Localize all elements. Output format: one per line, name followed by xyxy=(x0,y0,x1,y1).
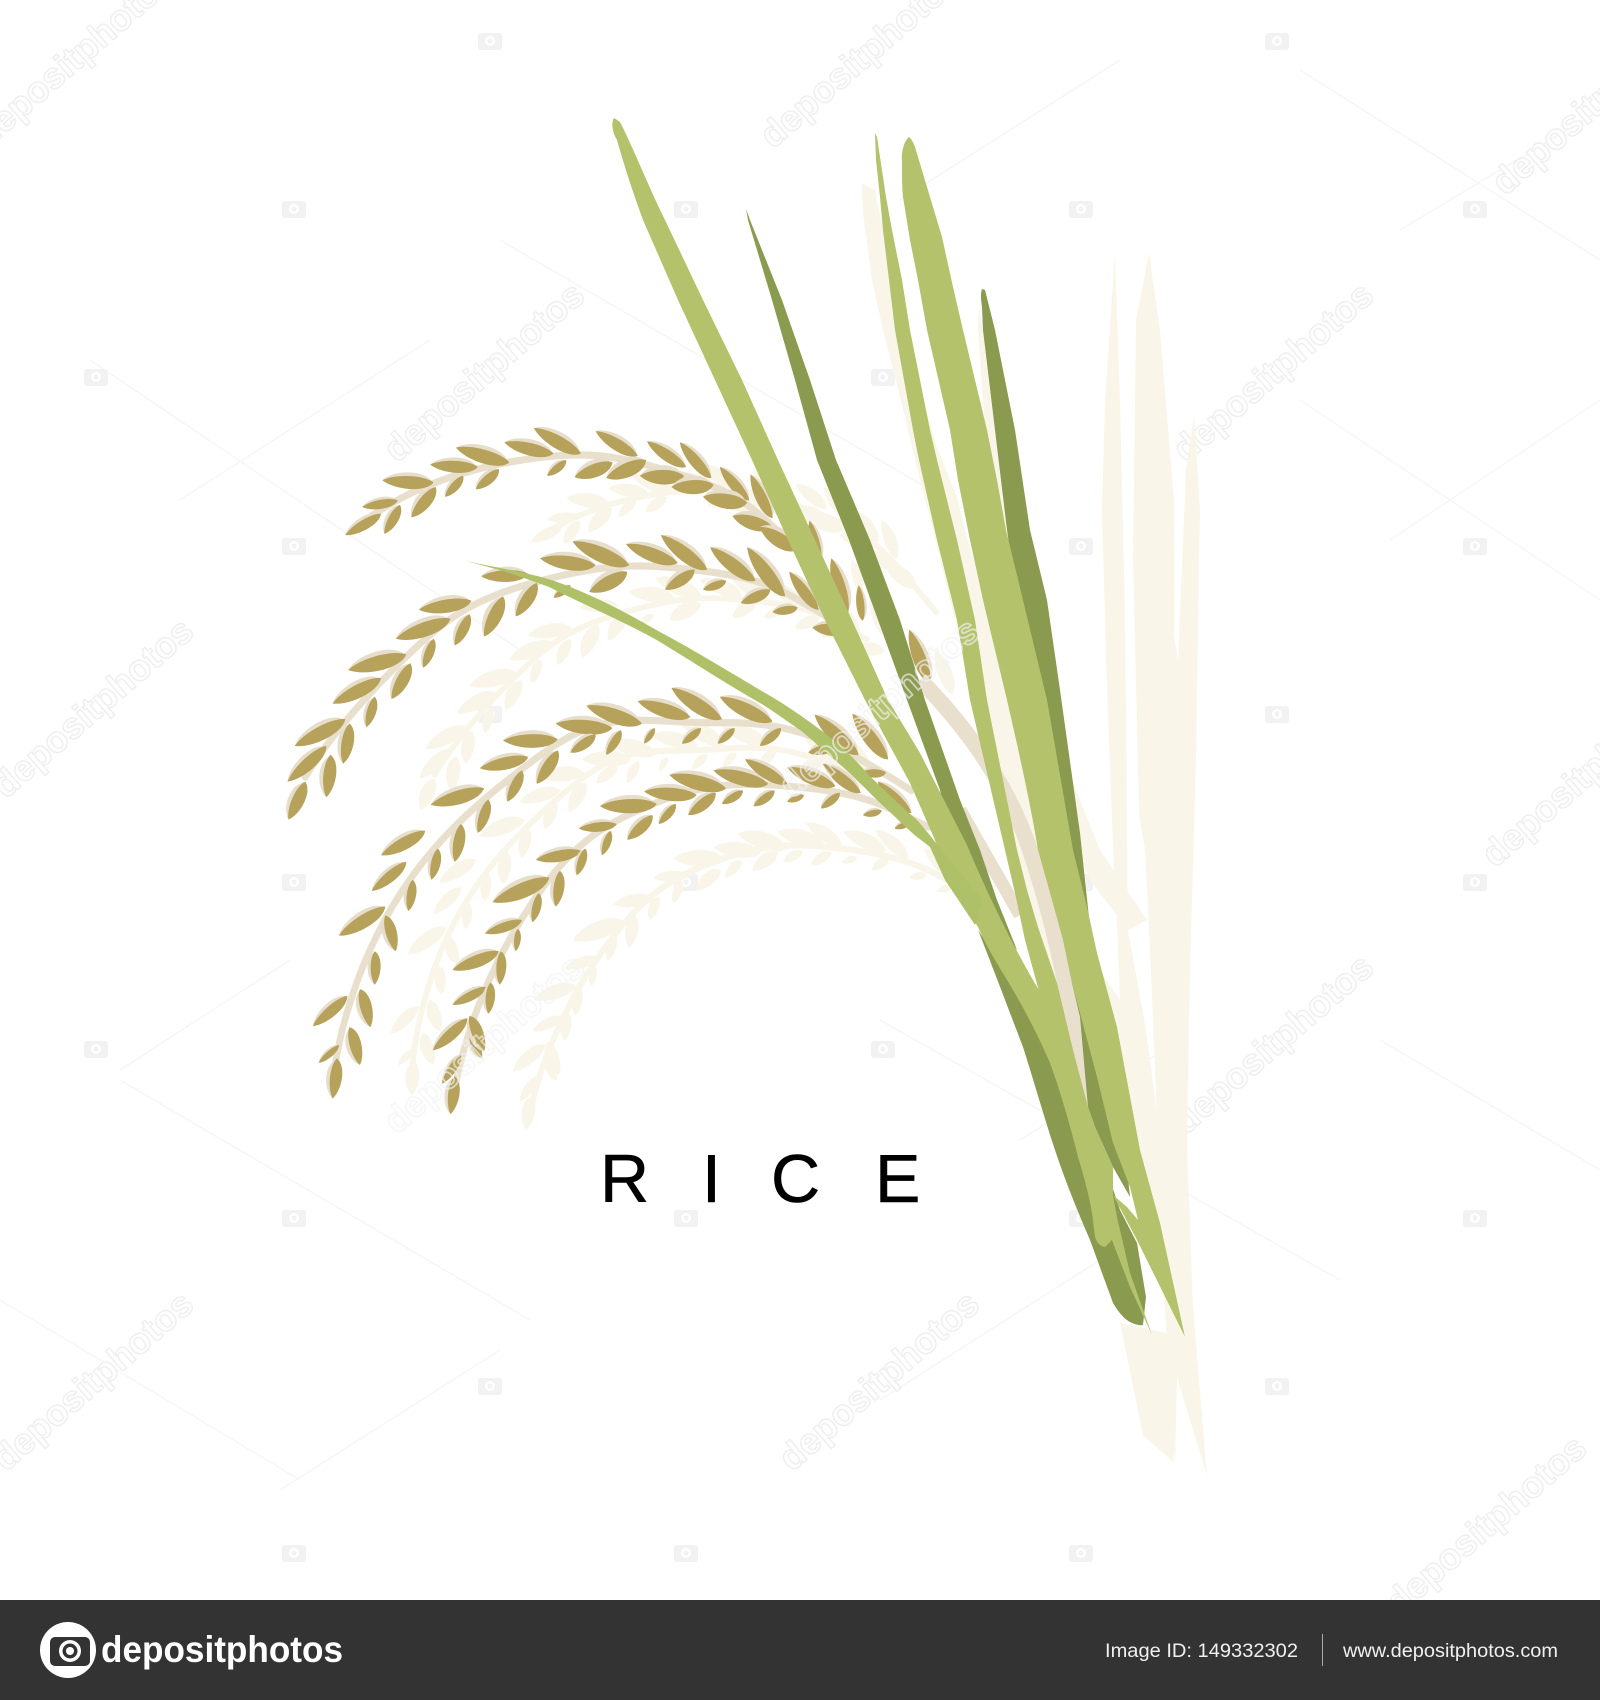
dark leaf lower base xyxy=(978,930,1146,1325)
green leaves xyxy=(465,118,1185,1337)
watermark over plant: depositphotos xyxy=(770,610,987,806)
ghost panicle 2 xyxy=(413,558,960,813)
watermark pattern: depositphotos xyxy=(375,274,592,470)
ghost shadow of the plant xyxy=(366,183,1207,1476)
divider xyxy=(1322,1634,1323,1666)
watermark pattern: depositphotos xyxy=(1164,946,1381,1142)
watermark over plant xyxy=(375,610,987,1142)
ghost panicle 3 xyxy=(366,700,911,1097)
panicle 1 xyxy=(342,420,823,576)
ghost panicle 1 xyxy=(525,443,947,612)
grass blade xyxy=(465,561,983,925)
broad light leaf xyxy=(902,137,1185,1337)
thin light leaf xyxy=(875,133,1057,995)
rice panicles xyxy=(280,420,939,1115)
website url: www.depositphotos.com xyxy=(1342,1640,1558,1662)
dark middle leaf xyxy=(746,209,1017,950)
watermark pattern: depositphotos xyxy=(1164,274,1381,470)
footer bar xyxy=(0,1600,1600,1700)
light long leaf xyxy=(612,118,1152,1335)
watermark pattern: depositphotos xyxy=(1377,1427,1594,1623)
panicle 2 xyxy=(280,518,939,823)
logo wordmark: depositphotos xyxy=(101,1629,343,1670)
panicle 4 xyxy=(428,752,928,1115)
image id: Image ID: 149332302 xyxy=(1105,1640,1298,1662)
panicle 3 xyxy=(308,679,911,1099)
dark leaf right xyxy=(981,289,1130,1197)
watermark pattern: depositphotos xyxy=(770,1283,987,1479)
ghost panicle 4 xyxy=(506,803,971,1150)
watermark over plant: depositphotos xyxy=(375,946,592,1142)
title: RICE xyxy=(600,1141,920,1217)
ghost leaves xyxy=(862,183,1207,1476)
logo icon: camera in circle xyxy=(40,1622,96,1678)
beige stems behind leaves xyxy=(920,680,1088,1107)
